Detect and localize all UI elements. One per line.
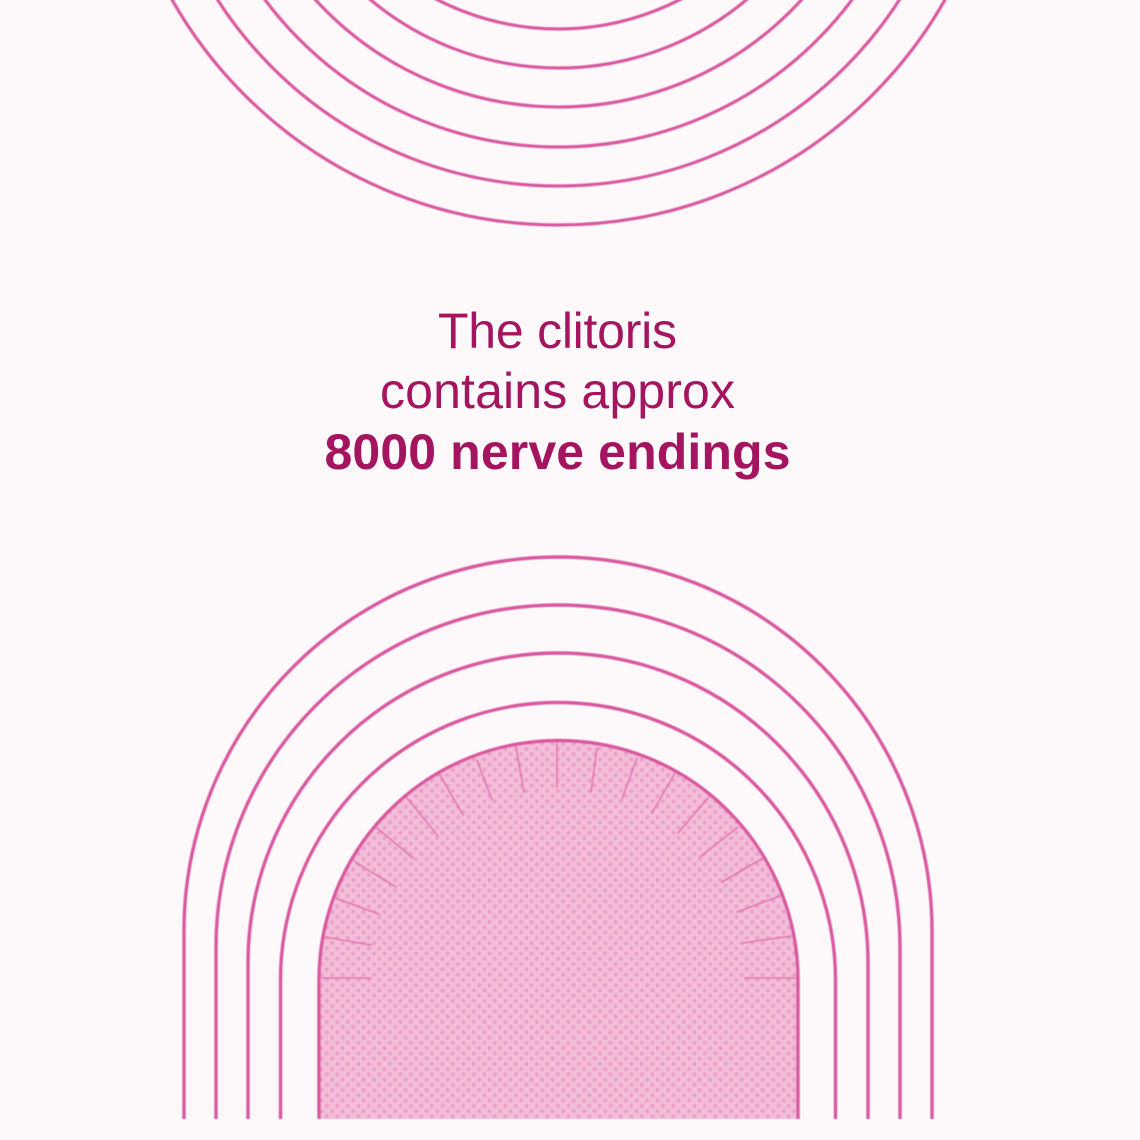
- arch 1 outer: [184, 557, 932, 1119]
- arch outline: [319, 740, 798, 1119]
- text line: 8000 nerve endings: 8000 nerve endings: [324, 424, 790, 480]
- text line: contains approx: contains approx: [380, 363, 735, 419]
- arch 2: [216, 605, 900, 1119]
- text block: nerve endings statement: [324, 303, 790, 480]
- arch 3: [248, 653, 868, 1119]
- arch 4: [280, 702, 836, 1119]
- dotted arch fill: [319, 740, 798, 1119]
- nested arches: bottom: [184, 557, 932, 1119]
- text line: The clitoris: The clitoris: [438, 303, 677, 359]
- concentric arcs: top: [114, 0, 1002, 225]
- nerve tick marks: [322, 743, 796, 978]
- filled dotted arch with nerve ticks: [319, 740, 798, 1119]
